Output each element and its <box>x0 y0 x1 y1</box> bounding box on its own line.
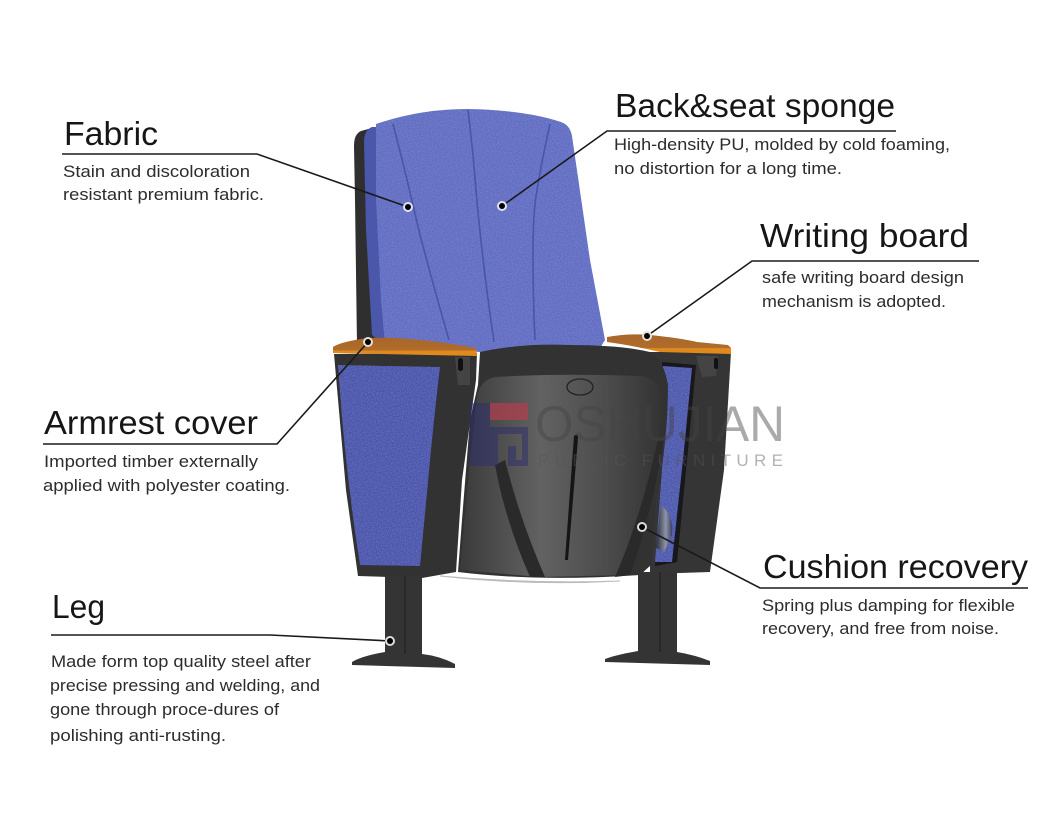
leg heading: Leg <box>52 588 105 625</box>
armrest heading: Armrest cover <box>44 404 258 441</box>
sponge leader line <box>497 131 896 211</box>
callout: fabric <box>62 115 413 212</box>
callout: cushion recovery <box>637 522 1029 638</box>
writing board description: safe writing board design <box>762 268 964 287</box>
watermark logo: PUBLIC FURNITURE <box>538 451 783 470</box>
cushion description: Spring plus damping for flexible <box>762 596 1015 615</box>
seat underside <box>440 345 668 583</box>
leg leader line <box>51 635 395 646</box>
cushion description: recovery, and free from noise. <box>762 619 999 638</box>
right side panel <box>650 352 731 574</box>
fabric leader line <box>62 154 413 212</box>
leg description <box>50 652 320 745</box>
fabric description <box>63 162 264 204</box>
right leg <box>605 572 710 665</box>
writing board heading: Writing board <box>760 217 969 254</box>
armrest description: applied with polyester coating. <box>43 476 290 495</box>
left side panel <box>334 353 477 578</box>
leg description: precise pressing and welding, and <box>50 676 320 695</box>
callout: leg <box>50 588 395 745</box>
fabric description: resistant premium fabric. <box>63 185 264 204</box>
sponge description: High-density PU, molded by cold foaming, <box>614 135 950 154</box>
sponge description: no distortion for a long time. <box>614 159 842 178</box>
cushion heading: Cushion recovery <box>763 548 1029 585</box>
sponge description <box>614 135 950 178</box>
armrest leader line <box>43 337 373 444</box>
left leg <box>352 575 455 668</box>
sponge heading: Back&seat sponge <box>615 87 895 124</box>
armrest description: Imported timber externally <box>44 452 259 471</box>
seat back stitching <box>393 110 550 342</box>
fabric heading: Fabric <box>64 115 158 152</box>
callout: writing board <box>642 217 979 341</box>
chair illustration <box>333 109 785 668</box>
callout: armrest cover <box>43 337 373 495</box>
callout: back and seat sponge <box>497 87 950 211</box>
cushion description <box>762 596 1015 638</box>
cushion leader line <box>637 522 1028 588</box>
left armrest <box>333 338 477 356</box>
leg description: Made form top quality steel after <box>51 652 311 671</box>
fabric description: Stain and discoloration <box>63 162 250 181</box>
right armrest <box>607 334 731 354</box>
leg description: gone through proce-dures of <box>50 700 279 719</box>
watermark logo <box>470 396 785 470</box>
writing board description: mechanism is adopted. <box>762 292 946 311</box>
writing board description <box>762 268 964 311</box>
armrest description <box>43 452 290 495</box>
leg description: polishing anti-rusting. <box>50 726 226 745</box>
seat back <box>354 109 605 352</box>
writing board leader line <box>642 261 979 341</box>
watermark logo: OSHUJIAN <box>535 396 785 452</box>
